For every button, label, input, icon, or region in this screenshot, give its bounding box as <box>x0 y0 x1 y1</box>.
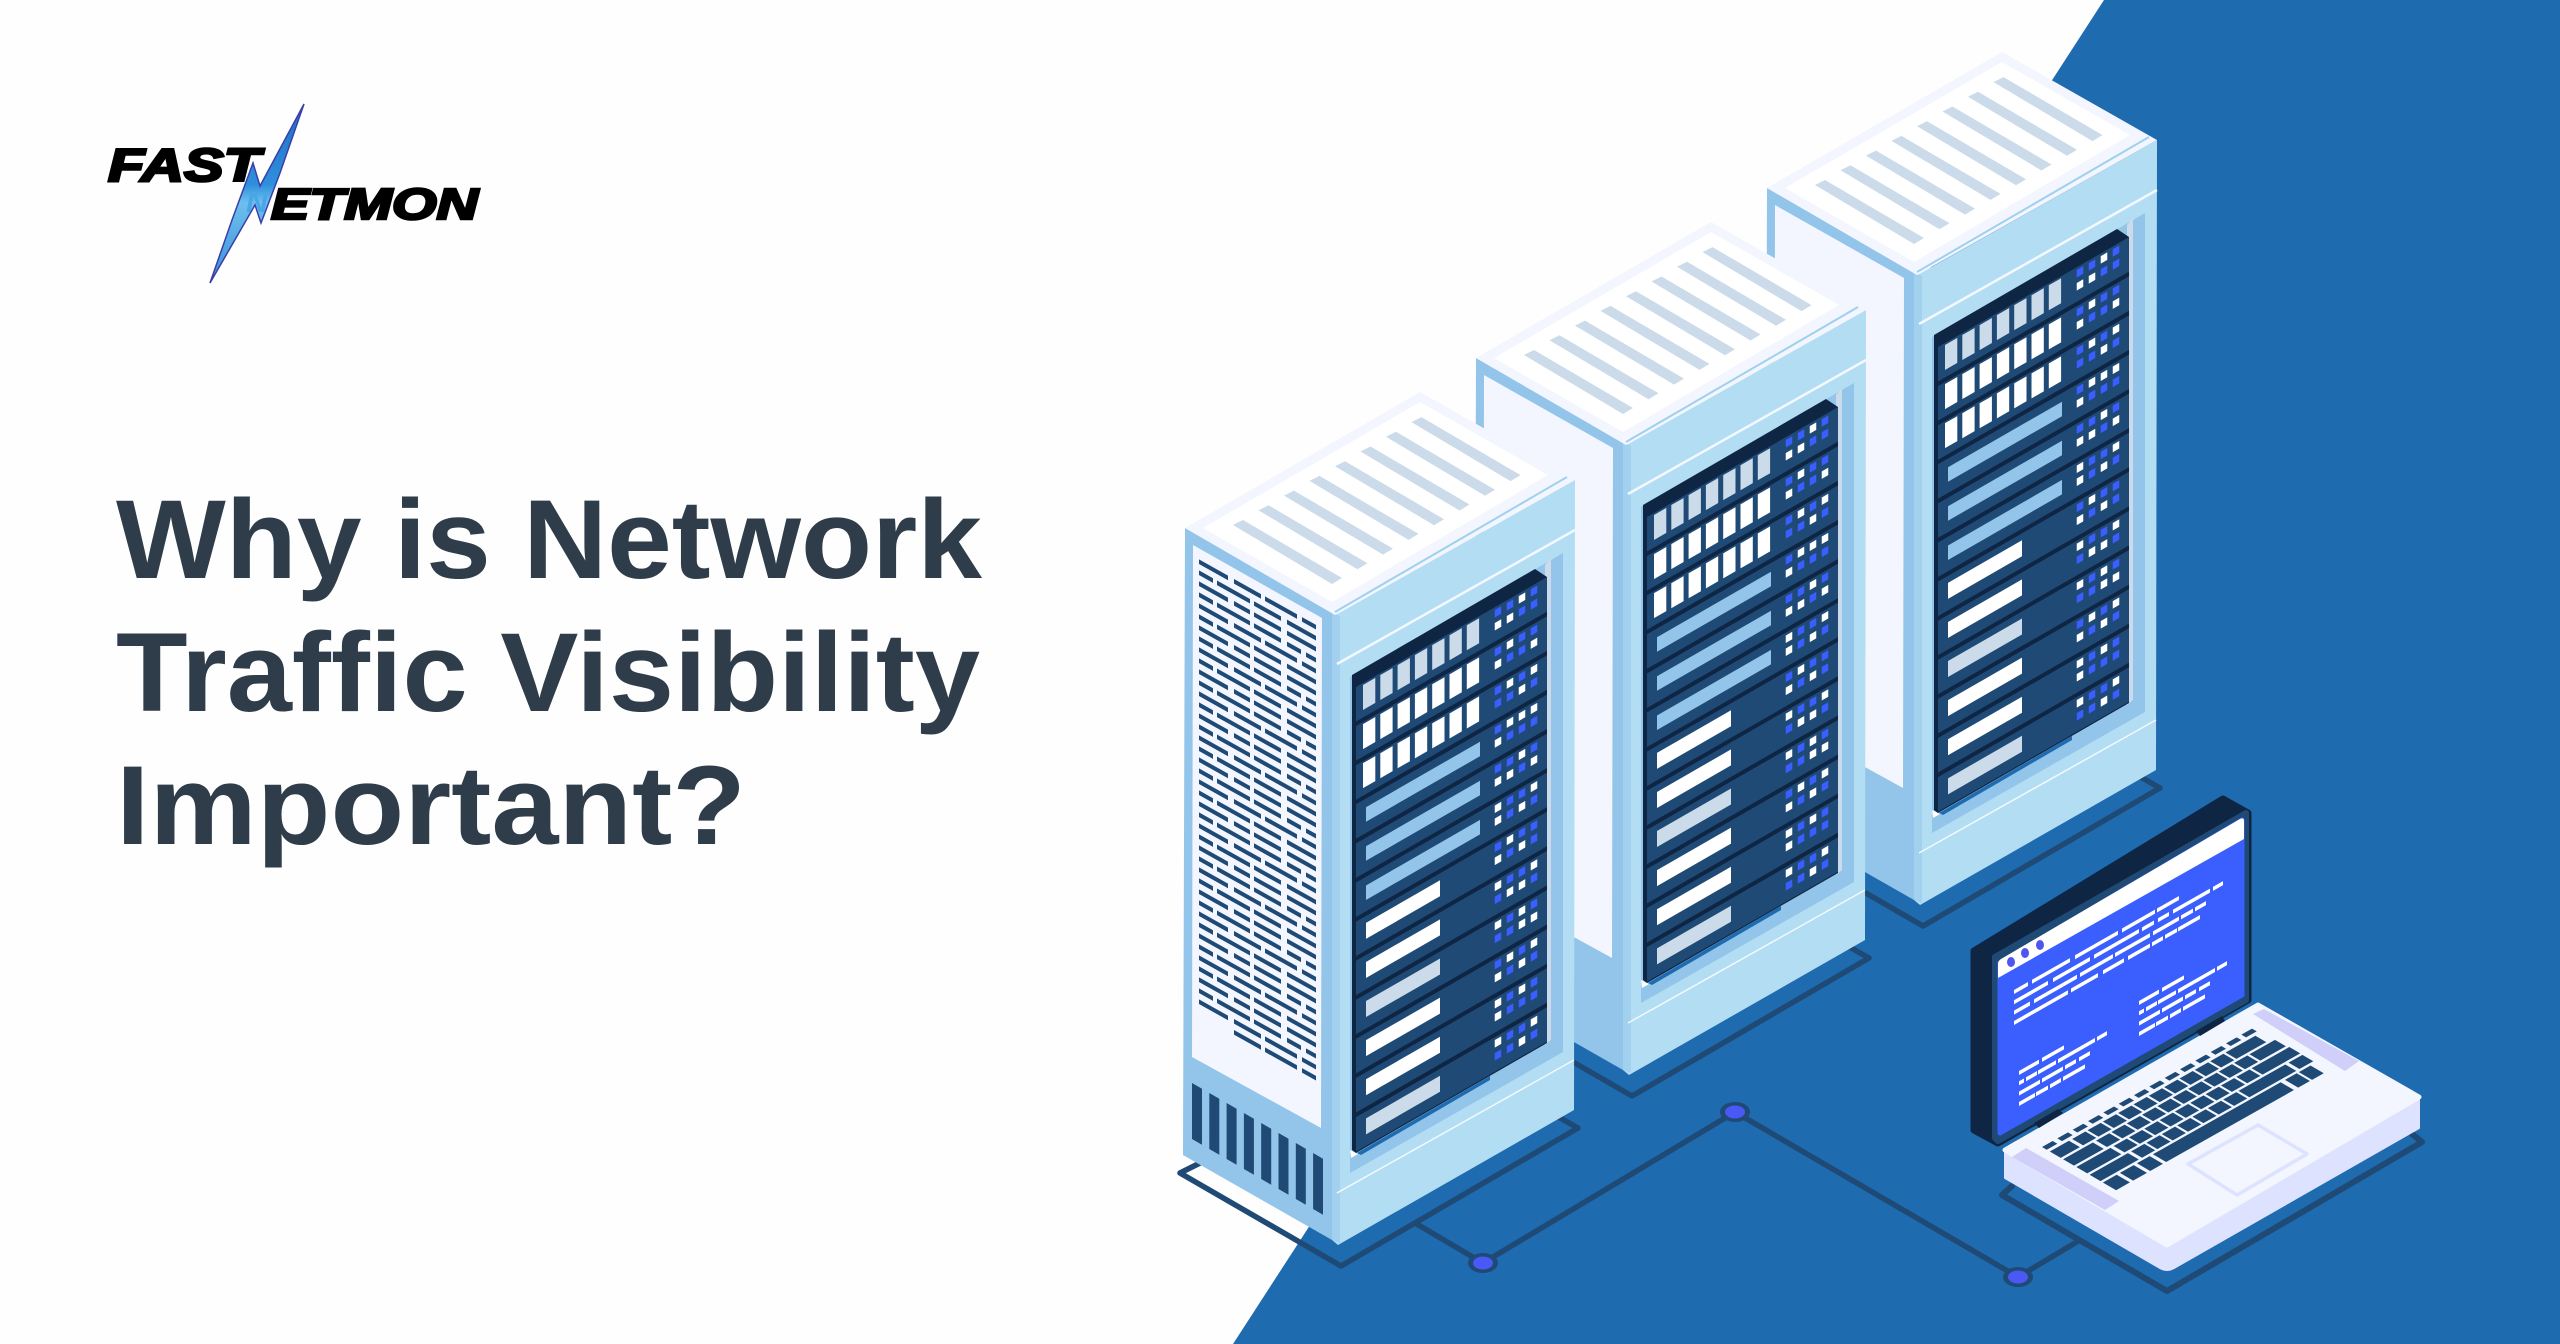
title line 3: Important? <box>116 743 746 868</box>
keyboard corner pads <box>2012 1009 2359 1210</box>
rack 1 side vent text lines <box>1199 562 1316 1078</box>
trackpad <box>2188 1125 2307 1195</box>
server rack 2 (middle) <box>1471 222 1869 1096</box>
laptop lid frame <box>1995 813 2246 1141</box>
screen text block B <box>2019 1023 2107 1104</box>
network connector lines <box>1415 1102 2080 1287</box>
blue diagonal panel <box>1233 0 2560 1344</box>
laptop footprint outline <box>2002 1134 2422 1291</box>
laptop hinges <box>2034 1016 2225 1128</box>
screen text block C <box>2139 953 2227 1034</box>
logo lightning bolt <box>210 104 304 283</box>
connector node 3 <box>2003 1267 2033 1287</box>
title <box>116 477 983 868</box>
laptop base top <box>2005 1005 2419 1245</box>
window dots <box>2007 940 2044 967</box>
logo word: ETMON: ETMON <box>271 180 480 229</box>
laptop <box>1974 799 2422 1291</box>
screen text block A <box>2014 873 2223 1023</box>
title line 1: Why is Network <box>116 477 983 602</box>
connector node 2 <box>1720 1102 1750 1122</box>
server rack 1 (front) <box>1180 392 1578 1266</box>
logo letter N inside bolt: N <box>246 186 269 219</box>
keyboard <box>2044 1028 2322 1186</box>
title line 2: Traffic Visibility <box>116 610 980 735</box>
server rack 3 (back) <box>1762 52 2160 926</box>
logo: FastNetmon <box>108 104 480 283</box>
screen title bar <box>1998 818 2244 978</box>
laptop lid back edge <box>1974 799 2248 1143</box>
laptop base side <box>2005 1005 2419 1270</box>
laptop screen <box>2000 820 2242 1133</box>
logo word: FAST: FAST <box>108 139 265 191</box>
rack 1 base vents <box>1192 1111 1323 1187</box>
connector node 1 <box>1468 1253 1498 1273</box>
